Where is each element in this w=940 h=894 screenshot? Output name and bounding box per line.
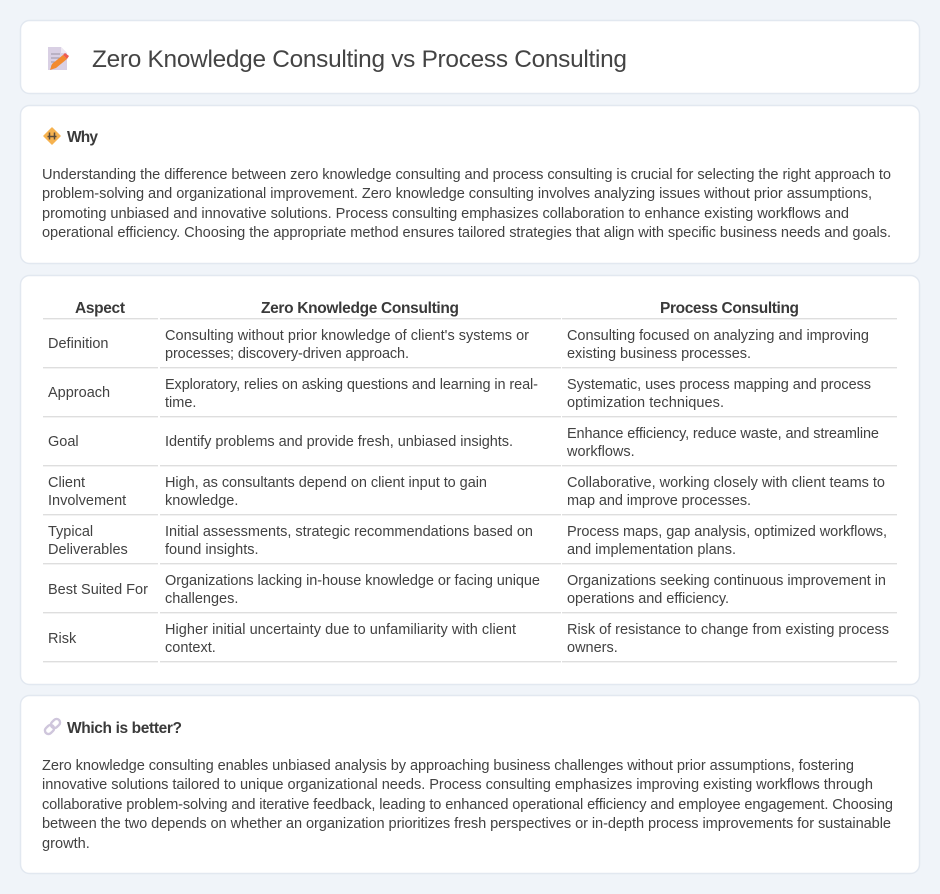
which is better paragraph: collaborative problem-solving and iterative feedback, leading to enhanced operational efficiency and employee engagement. Choosing [42,797,893,813]
row: typical deliverables: and implementation plans. [567,542,736,558]
row: approach: time. [165,395,196,411]
row: client involvement: Involvement [48,493,126,509]
row: client involvement: High, as consultants depend on client input to gain [165,475,487,491]
why paragraph: Understanding the difference between zero knowledge consulting and process consulting is crucial for selecting the right approach to [42,167,891,183]
row: typical deliverables: found insights. [165,542,259,558]
row: goal [43,426,897,466]
row: approach: Systematic, uses process mapping and process [567,377,871,393]
row: goal: workflows. [566,444,635,460]
row: approach [43,377,897,417]
heading: which is better: Which is better? [67,720,182,737]
panel: why [20,106,920,264]
row: typical deliverables: Typical [48,524,93,540]
row: approach: optimization techniques. [567,395,724,411]
row: goal: Identify problems and provide fresh, unbiased insights. [165,434,513,450]
why paragraph: promoting unbiased and innovative solutions. Process consulting emphasizes collaboration to enhance existing workflows and [42,206,849,222]
icon: document with pencil [48,47,69,70]
panel: comparison table [20,276,920,684]
which is better paragraph [42,758,893,852]
row: risk: Risk [48,631,77,647]
row: typical deliverables [43,524,897,564]
which is better paragraph: Zero knowledge consulting enables unbiased analysis by approaching business challenges without prior assumptions, fostering [42,758,854,774]
which is better paragraph: growth. [42,836,90,852]
row: typical deliverables: Process maps, gap analysis, optimized workflows, [567,524,887,540]
row: best suited for: operations and efficiency. [567,591,729,607]
why paragraph: operational efficiency. Choosing the appropriate method ensures tailored strategies that align with specific business needs and goals. [42,225,891,241]
icon: warning diamond [44,128,60,144]
panel: which is better [20,696,920,874]
row: definition: Definition [48,336,108,352]
why paragraph [42,167,891,241]
which is better paragraph: between the two depends on whether an organization prioritizes fresh perspectives or in-depth process improvements for sustainable [42,816,891,832]
row: approach: Exploratory, relies on asking questions and learning in real- [165,377,538,393]
row: client involvement [43,475,897,515]
row: client involvement: Collaborative, working closely with client teams to [567,475,885,491]
heading: why: Why [67,129,98,146]
icon: chain link [43,717,62,736]
row: risk: context. [165,640,216,656]
row: definition: Consulting focused on analyzing and improving [567,328,869,344]
row: typical deliverables: Deliverables [48,542,128,558]
row: client involvement: Client [48,475,85,491]
table header row: Zero Knowledge Consulting [261,300,459,317]
row: goal: Goal [48,434,79,450]
row: best suited for: challenges. [165,591,238,607]
row: risk: Higher initial uncertainty due to unfamiliarity with client [165,622,516,638]
title: Zero Knowledge Consulting vs Process Consulting [92,46,627,73]
row: definition: Consulting without prior knowledge of client's systems or [165,328,529,344]
table header row [43,300,897,319]
row: approach: Approach [48,385,110,401]
table header row: Process Consulting [660,300,799,317]
row: typical deliverables: Initial assessments, strategic recommendations based on [165,524,533,540]
row: definition: existing business processes. [567,346,751,362]
panel: title header [20,20,920,94]
row: definition [43,328,897,368]
row: client involvement: knowledge. [165,493,238,509]
which is better paragraph: innovative solutions tailored to unique organizational needs. Process consulting emphasizes improving existing workflows through [42,777,873,793]
row: best suited for: Best Suited For [48,582,148,598]
row: best suited for [43,573,897,613]
row: best suited for: Organizations seeking continuous improvement in [567,573,886,589]
row: risk: owners. [567,640,618,656]
row: best suited for: Organizations lacking in-house knowledge or facing unique [165,573,540,589]
row: risk: Risk of resistance to change from existing process [567,622,889,638]
row: client involvement: map and improve processes. [567,493,751,509]
row: definition: processes; discovery-driven approach. [165,346,409,362]
row: risk [43,622,897,662]
table header row: Aspect [75,300,125,317]
row: goal: Enhance efficiency, reduce waste, and streamline [567,426,879,442]
why paragraph: problem-solving and organizational improvement. Zero knowledge consulting involves analyzing issues without prior assumptions, [42,186,872,202]
